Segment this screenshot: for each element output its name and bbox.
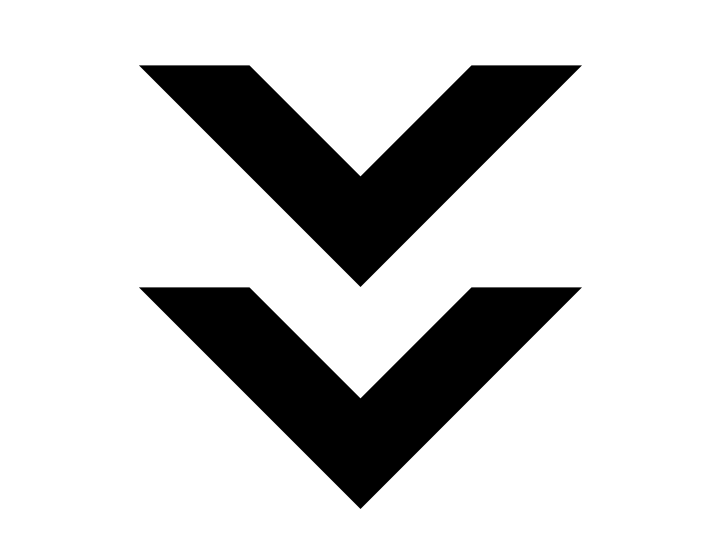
icon: lower chevron bbox=[139, 287, 582, 509]
icon: upper chevron bbox=[139, 65, 582, 287]
